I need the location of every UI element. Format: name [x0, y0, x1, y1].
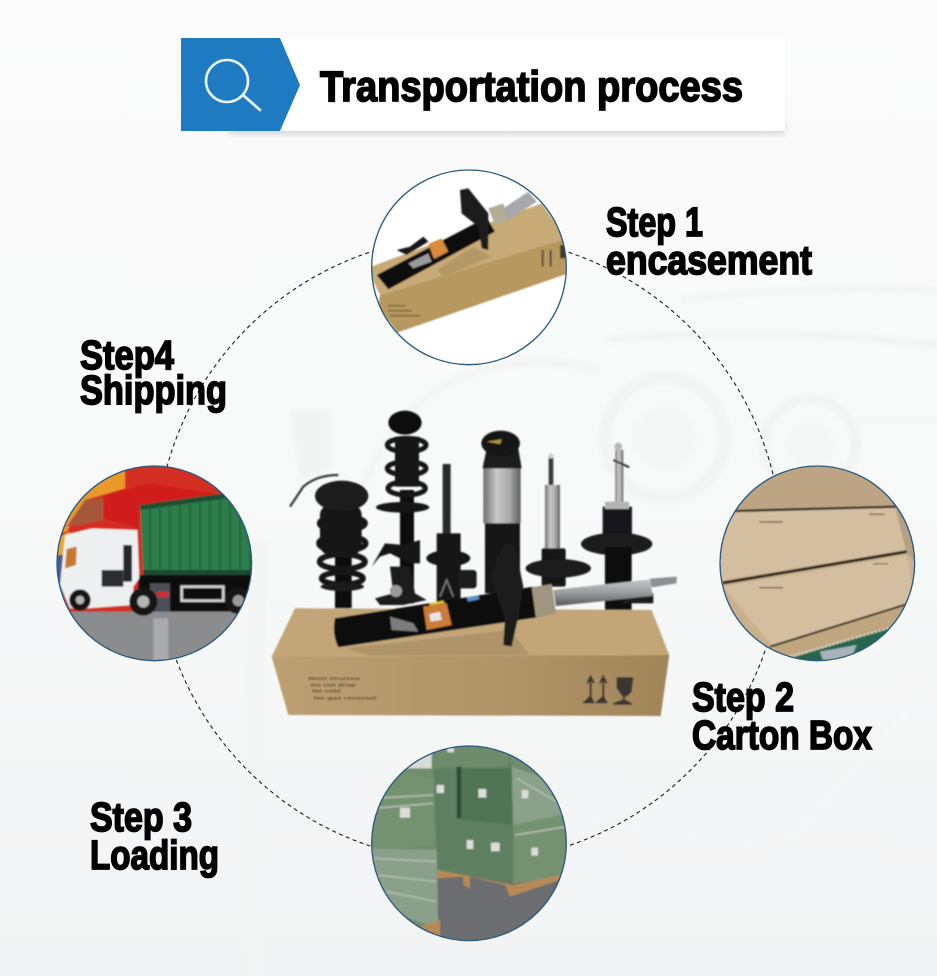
banner shadow: [228, 122, 785, 134]
label: step 1: [606, 199, 812, 283]
step 1 photo circle: [360, 170, 573, 365]
shock 2: tall coil strut: [372, 411, 429, 605]
main shock on carton: [334, 543, 677, 647]
label: step 4: [80, 332, 227, 413]
label: step 1: Step 1: [606, 199, 703, 245]
label: step 3: Step 3: [90, 794, 192, 840]
shock 3: slim strut: [426, 464, 477, 603]
dashed process ring: [156, 236, 782, 862]
label: step 2: Step 2: [692, 674, 794, 720]
title banner: [181, 38, 785, 134]
faint car background: [253, 289, 937, 976]
carton text: No cold: [312, 689, 341, 694]
label: step 4: Step4: [80, 332, 174, 378]
carton text: No gas reversal: [313, 695, 377, 700]
title text: Transportation process: [320, 63, 743, 111]
step 3 photo circle: wrapped pallets: [371, 745, 567, 942]
label: step 2: Carton Box: [692, 712, 872, 758]
label: step 2: [692, 674, 872, 758]
step 4 photo circle: container truck: [56, 465, 252, 662]
carton text: Moist structure: [308, 676, 361, 681]
label: step 4: Shipping: [80, 367, 227, 413]
shock 5: rod strut: [526, 453, 591, 587]
shock 1: coil spring strut with wire: [290, 475, 368, 608]
carton handling icons: [582, 677, 633, 704]
central product photo: shock absorbers on carton: [272, 411, 677, 716]
label: step 1: encasement: [606, 237, 812, 283]
carton text: Do not drop: [311, 683, 356, 688]
shock 6: black strut with seat: [581, 443, 653, 610]
label: step 3: Loading: [90, 832, 219, 878]
label: step 3: [90, 794, 219, 878]
carton text: [308, 676, 377, 700]
step 2 photo circle: carton boxes: [719, 465, 916, 662]
icon: blue arrow tab with magnifier: [181, 38, 300, 131]
carton box: [272, 608, 669, 716]
shock 4: air suspension bellows: [481, 431, 522, 593]
banner panel: [250, 38, 785, 131]
